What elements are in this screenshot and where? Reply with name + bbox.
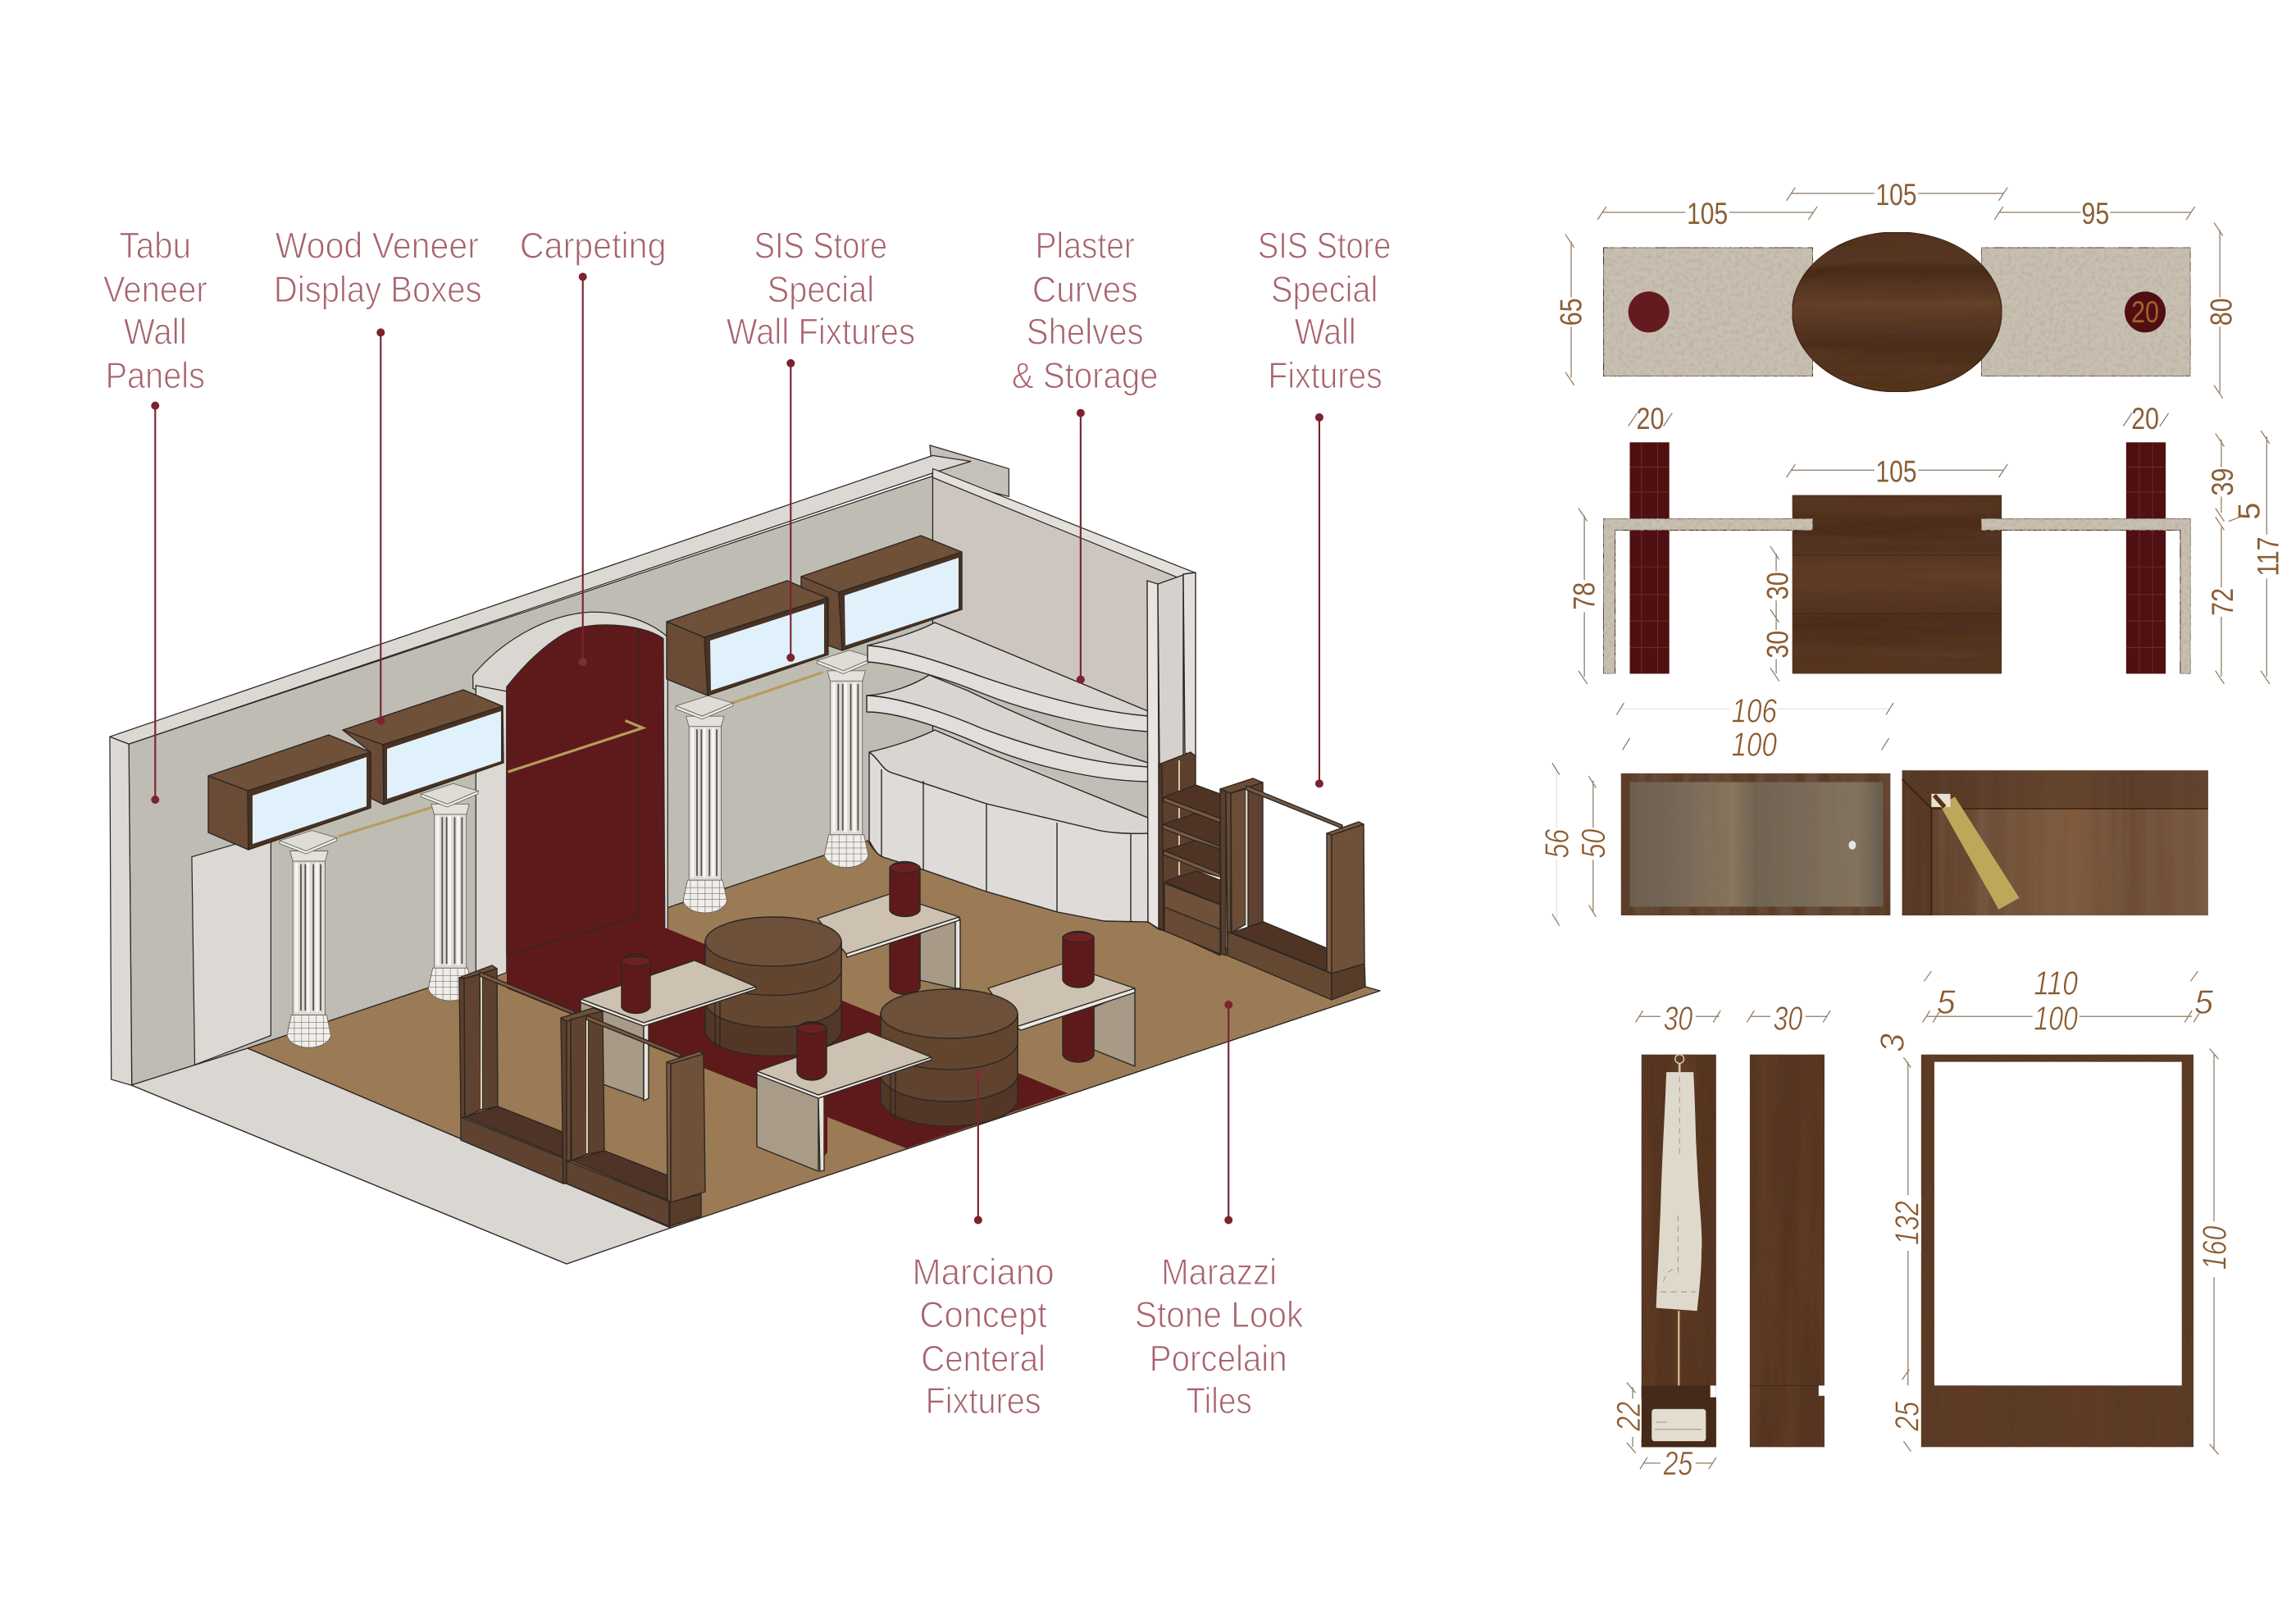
dims plan: [1554, 177, 2238, 399]
dims plan: 20: [2131, 294, 2159, 329]
dims elevation: 20: [2131, 401, 2159, 436]
label: SIS Store Special Wall Fixtures right: Special: [1271, 270, 1378, 310]
dims plan: 105: [1687, 196, 1728, 230]
red post left: [1629, 291, 1670, 332]
table D front: [757, 1022, 932, 1171]
dims panels: 110: [2034, 965, 2078, 1002]
dims panels: 30: [1664, 999, 1692, 1037]
box section view: [1902, 770, 2208, 915]
display box 3: [667, 581, 828, 696]
dims elevation: 20: [1637, 401, 1664, 436]
label: Tabu Veneer Wall Panels: Tabu: [120, 226, 191, 266]
base surface: [869, 730, 1148, 833]
label: Tabu Veneer Wall Panels: Wall: [124, 312, 187, 353]
label: Marazzi Stone Look Porcelain Tiles: Tiles: [1186, 1381, 1252, 1421]
folded item: [1651, 1409, 1706, 1441]
top shelf: [868, 623, 1148, 732]
stone bracket left: [1603, 518, 1813, 673]
isometric store drawing: [110, 445, 1380, 1264]
dims plan: 80: [2203, 298, 2238, 326]
label: Marazzi Stone Look Porcelain Tiles: [1135, 1252, 1304, 1421]
round stack 1: [705, 917, 841, 1056]
dims panels: 160: [2195, 1226, 2233, 1270]
unit base: [1164, 883, 1220, 929]
dims panels: 5: [1937, 983, 1956, 1021]
label: Marciano Concept Centeral Fixtures: [913, 1252, 1055, 1421]
label: Plaster Curves Shelves and Storage: & Storage: [1012, 356, 1158, 396]
stone bracket right: [1981, 518, 2190, 673]
floor and carpet group in page pixels: [131, 841, 1380, 1264]
label: Tabu Veneer Wall Panels: [103, 226, 207, 396]
dims panels: 30: [1773, 999, 1802, 1037]
dims elevation: 30: [1760, 631, 1794, 659]
label: Tabu Veneer Wall Panels: Panels: [106, 356, 205, 396]
round top: [1793, 232, 2002, 392]
middle shelf: [867, 675, 1148, 782]
centre block: [1793, 495, 2002, 673]
hanging rail: [508, 721, 643, 772]
labels: [103, 226, 1391, 1421]
columns: [280, 650, 874, 1050]
label: Plaster Curves Shelves and Storage: [1012, 226, 1158, 396]
arch: [473, 612, 1068, 1148]
dims panels: 25: [1663, 1444, 1692, 1482]
leader: Wood Veneer: [376, 328, 385, 725]
red arch niche: [507, 625, 665, 955]
leader: Carpeting: [579, 272, 587, 666]
label: SIS Store Special Wall Fixtures: SIS Store: [754, 226, 887, 266]
wall display boxes: [208, 536, 962, 850]
leader: SIS fixtures: [1315, 413, 1323, 787]
display box 2: [343, 690, 503, 805]
right wood frame: [1220, 778, 1365, 1000]
label: Plaster Curves Shelves and Storage: Shelves: [1027, 312, 1144, 353]
carpet: [507, 917, 1068, 1148]
post left: [1630, 442, 1670, 673]
dims elevation: 39: [2205, 468, 2239, 495]
label: Wood Veneer Display Boxes: Wood Veneer: [276, 226, 479, 266]
label: SIS Store Special Wall Fixtures: [727, 226, 915, 353]
label: Wood Veneer Display Boxes: Display Boxes: [274, 270, 482, 310]
plain panel: [1750, 1055, 1824, 1447]
leader lines: [151, 272, 1323, 1224]
leader: Marazzi: [1224, 1001, 1232, 1224]
label: SIS Store Special Wall Fixtures right: SIS Store: [1258, 226, 1391, 266]
table A left: [581, 954, 756, 1101]
label: Marazzi Stone Look Porcelain Tiles: Stone Look: [1135, 1295, 1304, 1335]
label: Wood Veneer Display Boxes: [274, 226, 482, 310]
panel with garment: [1642, 1055, 1716, 1447]
label: SIS Store Special Wall Fixtures right: Fixtures: [1268, 356, 1383, 396]
leader: SIS Store: [786, 359, 795, 662]
frame 2: [561, 1008, 705, 1226]
post right: [2126, 442, 2166, 673]
rails: [339, 673, 823, 837]
floor strip: [131, 1048, 671, 1264]
right wood shelving unit: [1159, 752, 1220, 956]
label: Marazzi Stone Look Porcelain Tiles: Marazzi: [1161, 1252, 1277, 1293]
red post right: [2125, 291, 2166, 332]
dims box: [1538, 691, 1893, 926]
dims plan: 105: [1875, 177, 1916, 212]
dims elevation: 117: [2251, 536, 2285, 577]
dims panels: [1610, 965, 2233, 1482]
end wall stub: [930, 445, 1009, 496]
front wood frames: [459, 965, 705, 1226]
display box details: [1538, 691, 2208, 926]
plan view: [1554, 177, 2238, 399]
table B back: [818, 861, 960, 994]
dims panels: 22: [1610, 1402, 1647, 1431]
dims panels: 100: [2034, 999, 2078, 1037]
frame 1: [459, 965, 574, 1184]
dims box: 106: [1732, 691, 1777, 729]
garment: [1656, 1072, 1702, 1311]
arch pier: [476, 686, 507, 984]
display box 1: [208, 735, 371, 850]
dims plan: 65: [1554, 298, 1588, 326]
dims elevation: 72: [2205, 588, 2239, 616]
round stack 2: [881, 989, 1018, 1126]
dims elevation: 30: [1760, 572, 1794, 600]
label: Marciano Concept Centeral Fixtures: Fixtures: [926, 1381, 1041, 1421]
wall panel details: [1610, 965, 2233, 1482]
dims box: 56: [1538, 829, 1575, 858]
central fixtures: [581, 861, 1135, 1171]
dims box: 50: [1574, 829, 1612, 858]
label: SIS Store Special Wall Fixtures right: [1258, 226, 1391, 396]
floor tiles: [248, 841, 1380, 1228]
shelves: [1164, 785, 1220, 819]
label: Plaster Curves Shelves and Storage: Curves: [1032, 270, 1138, 310]
table C right: [988, 932, 1135, 1066]
dims panels: 132: [1888, 1201, 1925, 1245]
door panel: [192, 839, 271, 1065]
plaster shelves and storage: [867, 573, 1196, 929]
leader: Tabu: [151, 402, 159, 804]
label: Plaster Curves Shelves and Storage: Plaster: [1036, 226, 1135, 266]
stone slab right: [1981, 248, 2190, 376]
box front view: [1621, 773, 1890, 915]
left wall: [110, 455, 971, 1085]
label: Marciano Concept Centeral Fixtures: Marciano: [913, 1252, 1055, 1293]
right wall: [933, 468, 1195, 923]
label: SIS Store Special Wall Fixtures: Wall Fixtures: [727, 312, 915, 353]
shelf shadows: [935, 675, 1148, 818]
base cabinet: [869, 752, 1148, 922]
label: SIS Store Special Wall Fixtures right: Wall: [1295, 312, 1356, 353]
frame: [1921, 1055, 2194, 1447]
corner pier: [1147, 573, 1196, 929]
label: Carpeting: Carpeting: [520, 226, 667, 266]
label: Marciano Concept Centeral Fixtures: Centeral: [921, 1339, 1046, 1379]
leader: Plaster: [1077, 409, 1085, 684]
dims panels: 5: [2194, 983, 2213, 1021]
dims elevation: 5: [2231, 503, 2266, 520]
leader: Marciano: [974, 1070, 982, 1224]
dims elevation: 78: [1567, 582, 1601, 610]
elevation view: [1567, 401, 2285, 684]
label: Marazzi Stone Look Porcelain Tiles: Porcelain: [1150, 1339, 1287, 1379]
label: SIS Store Special Wall Fixtures: Special: [768, 270, 874, 310]
dims panels: 25: [1888, 1402, 1925, 1431]
label: Tabu Veneer Wall Panels: Veneer: [103, 270, 207, 310]
label: Marciano Concept Centeral Fixtures: Concept: [919, 1295, 1047, 1335]
stone slab left: [1603, 248, 1813, 376]
display box 4: [801, 536, 962, 650]
dims panels: 3: [1873, 1033, 1911, 1052]
dims plan: 95: [2081, 196, 2109, 230]
dims elevation: 105: [1875, 454, 1916, 488]
dims elevation: [1567, 401, 2285, 684]
dims box: 100: [1732, 725, 1777, 763]
